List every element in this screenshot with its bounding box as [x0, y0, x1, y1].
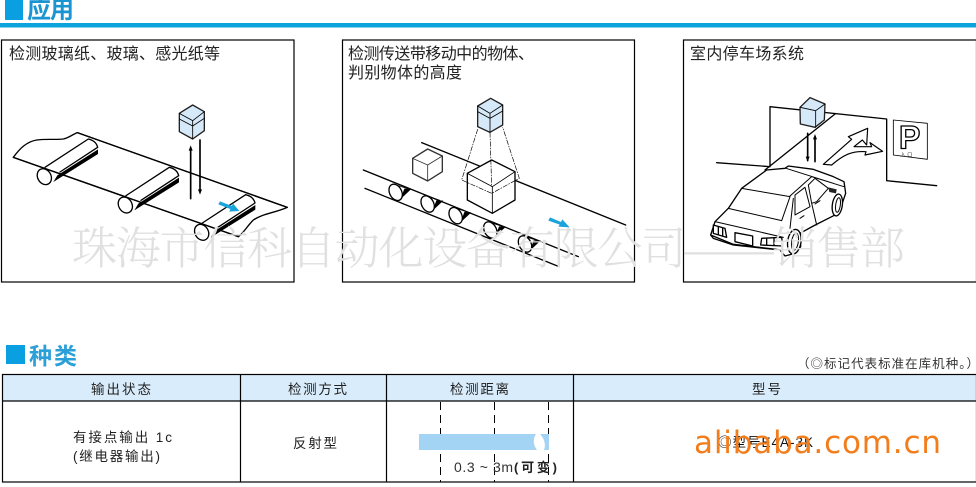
table: product types: [2, 374, 976, 482]
icon: parking sign: P: [899, 120, 920, 156]
cell: output state: (继电器输出): [73, 449, 160, 464]
cell: output state: [73, 429, 172, 464]
chart: detection distance: [419, 402, 557, 482]
small cube: [413, 149, 442, 181]
arrow: travel direction: [548, 217, 570, 227]
table: product types: 检测距离: [450, 381, 509, 397]
table: product types: 型号: [752, 382, 781, 397]
cell: model: ◎型号E4A-3K: [718, 435, 813, 450]
conveyor film with rollers: [13, 105, 287, 243]
chart: detection distance: 0.3 ~ 3m: [454, 459, 513, 475]
car: [711, 166, 846, 256]
arrows: signal up and down: [189, 140, 202, 199]
parking scene: [717, 98, 937, 186]
icon: sensor: [179, 105, 204, 139]
heading: types: [6, 343, 77, 369]
table header row: [2, 374, 976, 401]
panel title: film detection: 检测玻璃纸、玻璃、感光纸等: [9, 45, 220, 63]
panel title: conveyor detection: 检测传送带移动中的物体、: [348, 45, 534, 63]
chart: detection distance: (可变): [514, 460, 557, 475]
heading: types: 种类: [29, 343, 77, 369]
panel: conveyor detection: [342, 40, 634, 282]
watermark: alibaba: alibaba.com.cn: [694, 425, 941, 461]
detection beam dash-dot: [462, 127, 519, 193]
panel: parking system: [684, 40, 976, 282]
arrow: travel direction: [218, 201, 239, 212]
large cube: [467, 160, 515, 213]
panel title: conveyor detection: [348, 45, 534, 82]
panel title: parking system: 室内停车场系统: [690, 45, 804, 63]
arrows: signal up and down: [806, 133, 817, 162]
icon: sensor: [478, 98, 503, 132]
cell: detection method: 反射型: [293, 436, 337, 451]
icon: sensor: [800, 98, 825, 127]
note: stock marker: （◎标记代表标准在库机种。）: [797, 356, 976, 371]
heading: applications: [5, 0, 74, 24]
cell: output state: 有接点输出 1c: [73, 429, 172, 445]
icon: parking sign: [893, 120, 927, 159]
panel: film detection: [2, 40, 294, 282]
watermark: company name: 珠海市信科自动化设备有限公司——销售部: [72, 224, 905, 274]
icon: parking sign: 入 口: [900, 152, 912, 159]
table: product types: 输出状态: [91, 382, 151, 397]
conveyor with cubes: [363, 98, 626, 267]
panel title: conveyor detection: 判别物体的高度: [348, 64, 462, 82]
table: product types: 检测方式: [288, 382, 348, 397]
arrow: entry branching: [823, 128, 883, 165]
